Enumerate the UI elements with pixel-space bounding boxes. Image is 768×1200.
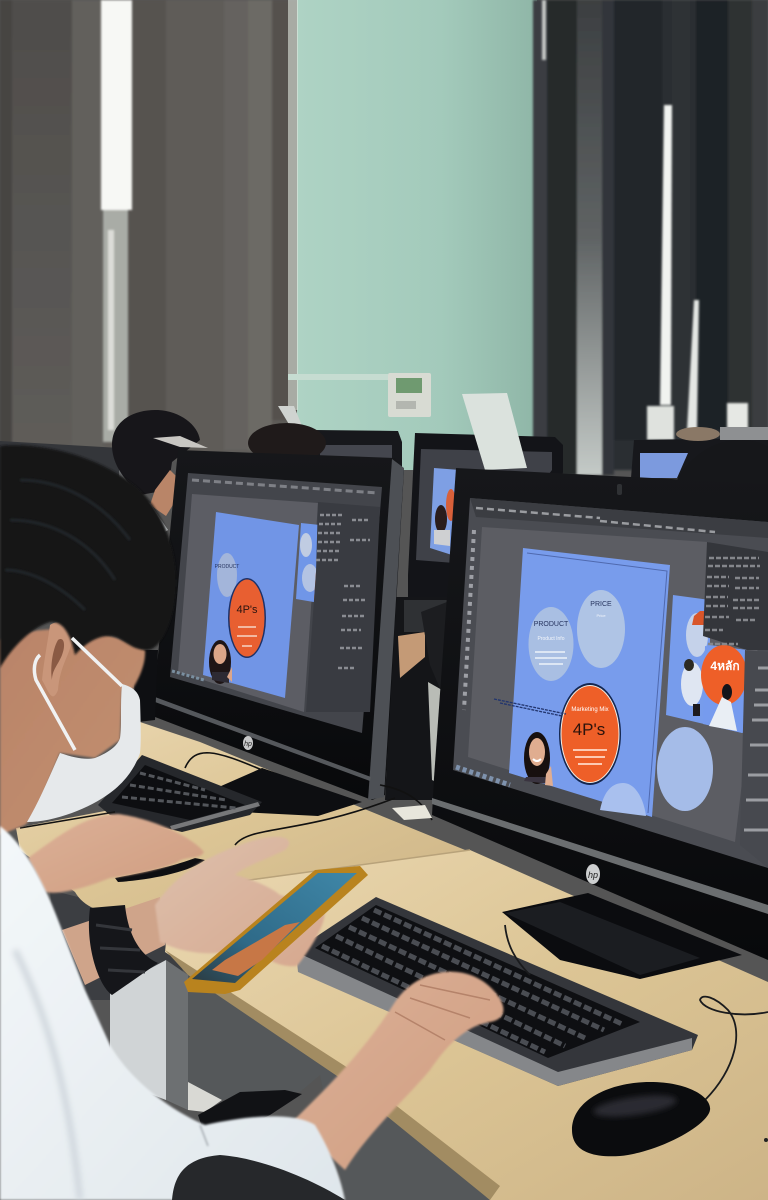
circle: product: PRODUCT (534, 621, 569, 628)
seated classmate arm (398, 632, 425, 678)
hair highlights (5, 480, 130, 610)
webcam (617, 484, 622, 495)
circle: product: Product Info (538, 636, 565, 642)
middle monitor product circle: PRODUCT (215, 564, 239, 570)
keys (315, 905, 640, 1058)
small artwork: orange 4 lak poster: 4หลัก (710, 659, 740, 673)
student's white shirt (0, 826, 345, 1200)
right back monitor screen (640, 453, 688, 478)
middle monitor portrait (209, 640, 232, 684)
far left monitor edge (119, 448, 127, 490)
left classmate hand on mouse (28, 814, 204, 893)
desk seam (235, 850, 470, 882)
student's left forearm (62, 897, 165, 985)
circle: price (577, 590, 625, 668)
big monitor toolbar marks (476, 508, 715, 532)
middle monitor taskbar (172, 671, 204, 680)
gap behind middle monitor (385, 597, 450, 800)
chair backrest (172, 1155, 345, 1200)
small back monitor (315, 430, 402, 470)
big monitor artboard (509, 548, 670, 817)
middle monitor chin highlight (155, 697, 371, 781)
dark trousers (198, 1090, 302, 1145)
big monitor chin highlight (432, 798, 768, 914)
portrait on artboard (524, 732, 553, 786)
wristwatch (89, 905, 158, 995)
circle: price: Price (596, 613, 606, 618)
stray text on canvas (494, 699, 566, 716)
hp logo, big monitor (586, 864, 600, 884)
paper on monitor (462, 393, 527, 470)
right dark curtains (533, 0, 768, 475)
fingers on keyboard (395, 985, 490, 1040)
middle monitor (154, 450, 404, 800)
right side panel rows (744, 668, 768, 830)
front keyboard (296, 897, 698, 1086)
dark gap behind forearm (50, 890, 190, 1000)
middle monitor canvas (178, 494, 318, 712)
middle monitor product circle (215, 553, 239, 597)
pale panel behind (428, 682, 442, 785)
rear keyboard (98, 755, 262, 832)
middle monitor screen (170, 473, 382, 733)
small artboard (666, 595, 747, 733)
far classmate head (676, 427, 720, 441)
dark desk leg (166, 960, 188, 1110)
middle monitor menu bar (192, 480, 378, 493)
back monitor artboard (430, 468, 460, 555)
circle: grey-blue beside artboard (657, 727, 713, 811)
middle monitor panel controls (316, 515, 370, 668)
small back monitor screen (320, 445, 392, 470)
middle monitor right side (368, 459, 404, 800)
window light slit, left (101, 0, 132, 442)
big monitor taskbar (456, 767, 510, 785)
mouse (572, 1082, 710, 1156)
dark modesty panel (188, 975, 490, 1200)
right back monitor (631, 438, 768, 480)
big monitor tool panel (703, 542, 768, 650)
big monitor toolbar (470, 498, 768, 538)
paper on small monitor (278, 406, 302, 426)
background monitors and classmates (0, 393, 768, 800)
small cable dot (764, 1138, 768, 1142)
ear shadow (51, 639, 64, 680)
circle: product (528, 607, 574, 681)
front desk (165, 850, 768, 1200)
mouse under rear hand (115, 858, 205, 882)
back monitor portrait (434, 505, 450, 546)
orange 4P's badge (559, 683, 621, 785)
keyboard body (296, 897, 698, 1086)
hp logo, middle monitor: hp (244, 741, 252, 748)
orange 4P's badge: 4P's (573, 720, 605, 739)
big monitor canvas (468, 527, 768, 842)
monitor-top paper (153, 436, 208, 448)
student's face (0, 629, 145, 835)
floor below desk (188, 1082, 222, 1112)
student's right arm and hand on keyboard (292, 972, 503, 1170)
orange 4P's badge: Marketing Mix (571, 707, 609, 713)
back chair (421, 602, 447, 705)
face mask (27, 638, 141, 822)
dark gap beside nose (130, 650, 158, 722)
small artboard circles (681, 611, 708, 716)
cables on desk (20, 753, 432, 845)
classmate shirt (138, 497, 168, 535)
back monitor (408, 433, 563, 600)
front desk edge (165, 950, 500, 1200)
white cable tag (392, 805, 432, 820)
big monitor stand (502, 893, 742, 979)
right side panel (740, 650, 768, 868)
middle monitor small artwork (300, 533, 338, 606)
classmate head, centre (248, 423, 326, 463)
middle monitor stand (212, 768, 362, 816)
circle: bottom partial (600, 783, 646, 816)
big monitor tool strip (464, 530, 474, 710)
under-desk area (50, 890, 490, 1200)
classmate face (150, 470, 178, 516)
far left monitor (0, 441, 127, 490)
big monitor (432, 468, 768, 960)
student's hair (0, 445, 176, 668)
desk clutter keyboard (404, 600, 447, 632)
classmate hair, right (676, 440, 768, 486)
smartphone (184, 866, 368, 994)
middle monitor artboard (203, 512, 299, 698)
circle: price: PRICE (590, 601, 612, 608)
thermostat on wall (388, 373, 431, 417)
student's left hand (155, 837, 325, 966)
back monitor screen (416, 449, 552, 565)
silver desk leg (110, 960, 166, 1100)
artboard inner line (527, 553, 667, 813)
rear desk (16, 722, 470, 914)
middle monitor tool panel (306, 502, 380, 712)
window light slits, right (542, 0, 748, 440)
keyboard silver rim (296, 952, 692, 1086)
classmate head, left (112, 410, 200, 495)
background: left grey curtains (0, 0, 300, 460)
grey device behind (720, 427, 768, 440)
hp logo, big monitor: hp (588, 870, 598, 880)
small artwork: orange 4 lak poster (701, 645, 747, 733)
middle monitor orange badge: 4P's (236, 604, 258, 616)
big monitor screen (453, 498, 768, 868)
back monitor orange badge (446, 489, 456, 521)
student's ear (42, 622, 72, 696)
panel rows (705, 558, 760, 644)
hp logo, middle monitor (243, 736, 253, 750)
green wall (288, 0, 537, 470)
mouse cable (505, 925, 768, 1100)
middle monitor orange badge (228, 578, 266, 658)
middle monitor frame (154, 450, 404, 800)
big monitor frame (432, 468, 768, 960)
middle monitor small artboard (296, 523, 340, 606)
